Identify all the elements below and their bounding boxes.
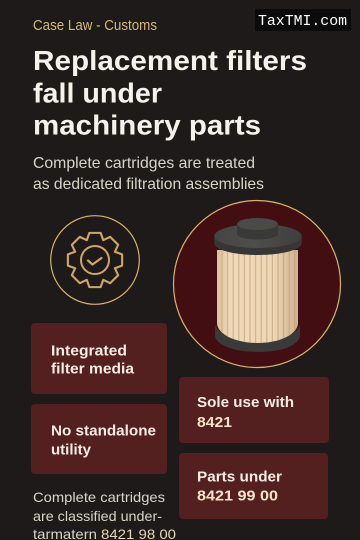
subtitle: Complete cartridges are treated: [33, 155, 255, 172]
card: sole use with 8421: [179, 377, 329, 443]
panel: product photo circle: [174, 200, 340, 368]
card: integrated filter media: Integrated: [51, 342, 127, 360]
watermark: [255, 9, 351, 31]
subtitle: [33, 155, 264, 193]
title: Replacement filters: [33, 45, 307, 76]
conclusion text: are classified under-: [33, 508, 162, 524]
conclusion text: Complete cartridges: [33, 489, 165, 505]
card: parts under 8421 99 00: 8421 99 00: [197, 488, 278, 504]
card: integrated filter media: [31, 323, 167, 394]
watermark: TaxTMI.com: [258, 14, 347, 30]
illustration: filter cartridge: [214, 218, 302, 352]
conclusion text: [33, 489, 176, 540]
card: sole use with 8421: 8421: [197, 414, 232, 431]
card: no standalone utility: utility: [51, 442, 92, 458]
eyebrow: Case Law - Customs: [33, 18, 157, 34]
card: sole use with 8421: Sole use with: [197, 394, 294, 411]
card: no standalone utility: No standalone: [51, 422, 156, 440]
title: machinery parts: [33, 110, 261, 140]
card: no standalone utility: [31, 404, 167, 474]
subtitle: as dedicated filtration assemblies: [33, 176, 264, 193]
card: parts under 8421 99 00: Parts under: [197, 468, 282, 486]
title: [33, 45, 307, 140]
card: integrated filter media: filter media: [51, 360, 135, 378]
title: fall under: [33, 78, 162, 108]
icon: gear with check: [51, 216, 139, 304]
card: parts under 8421 99 00: [179, 453, 328, 519]
